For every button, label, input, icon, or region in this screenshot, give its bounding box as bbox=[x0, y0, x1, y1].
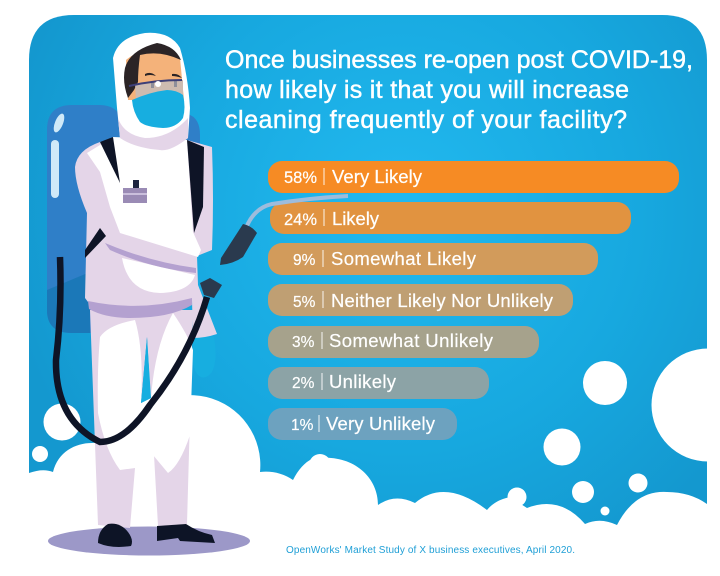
badge bbox=[123, 180, 147, 203]
hood bbox=[113, 33, 190, 150]
bar: 2% unlikely: Unlikely bbox=[329, 371, 397, 392]
bar: 24% likely: Likely bbox=[332, 208, 380, 229]
bar: 1% very unlikely: 1% bbox=[291, 417, 314, 434]
bar: 3% somewhat unlikely bbox=[268, 326, 539, 358]
coat bbox=[75, 137, 217, 338]
bar: 9% somewhat likely bbox=[268, 243, 598, 275]
bar: 1% very unlikely bbox=[268, 408, 457, 440]
hose bbox=[56, 257, 207, 442]
glove bbox=[193, 337, 216, 378]
source note: OpenWorks' Market Study of X business executives, April 2020. bbox=[286, 545, 575, 556]
wand bbox=[246, 196, 348, 228]
bar: 58% very likely: 58% bbox=[284, 169, 317, 187]
bar: 3% somewhat unlikely: 3% bbox=[292, 334, 315, 351]
bar: 58% very likely: Very Likely bbox=[332, 166, 423, 187]
backpack bbox=[47, 105, 200, 333]
illustration: worker in protective suit bbox=[47, 33, 348, 555]
bar: 2% unlikely: 2% bbox=[292, 375, 315, 392]
face mask bbox=[132, 90, 184, 128]
title: Once businesses re-open post COVID-19, bbox=[225, 46, 693, 74]
spray gun bbox=[200, 224, 257, 298]
shoes bbox=[98, 524, 215, 547]
legs bbox=[90, 310, 193, 528]
floor shadow bbox=[48, 526, 250, 556]
title: cleaning frequently of your facility? bbox=[225, 106, 627, 134]
bar: 24% likely bbox=[270, 202, 631, 234]
bar: 2% unlikely bbox=[268, 367, 489, 399]
bar: 58% very likely bbox=[268, 161, 679, 193]
bar: 9% somewhat likely: Somewhat Likely bbox=[331, 248, 477, 269]
bar: 5% neither: Neither Likely Nor Unlikely bbox=[331, 290, 554, 311]
bar: 3% somewhat unlikely: Somewhat Unlikely bbox=[329, 330, 494, 351]
bar: 5% neither bbox=[268, 284, 573, 316]
straps bbox=[85, 137, 204, 258]
title: how likely is it that you will increase bbox=[225, 76, 629, 104]
bar: 5% neither: 5% bbox=[293, 294, 316, 311]
bar: 9% somewhat likely: 9% bbox=[293, 252, 316, 269]
face bbox=[124, 43, 184, 100]
bubbles and foam clouds bbox=[29, 348, 720, 576]
title bbox=[225, 46, 693, 134]
bar chart: likelihood responses bbox=[268, 161, 679, 440]
bar: 1% very unlikely: Very Unlikely bbox=[326, 413, 436, 434]
bar: 24% likely: 24% bbox=[284, 211, 317, 229]
